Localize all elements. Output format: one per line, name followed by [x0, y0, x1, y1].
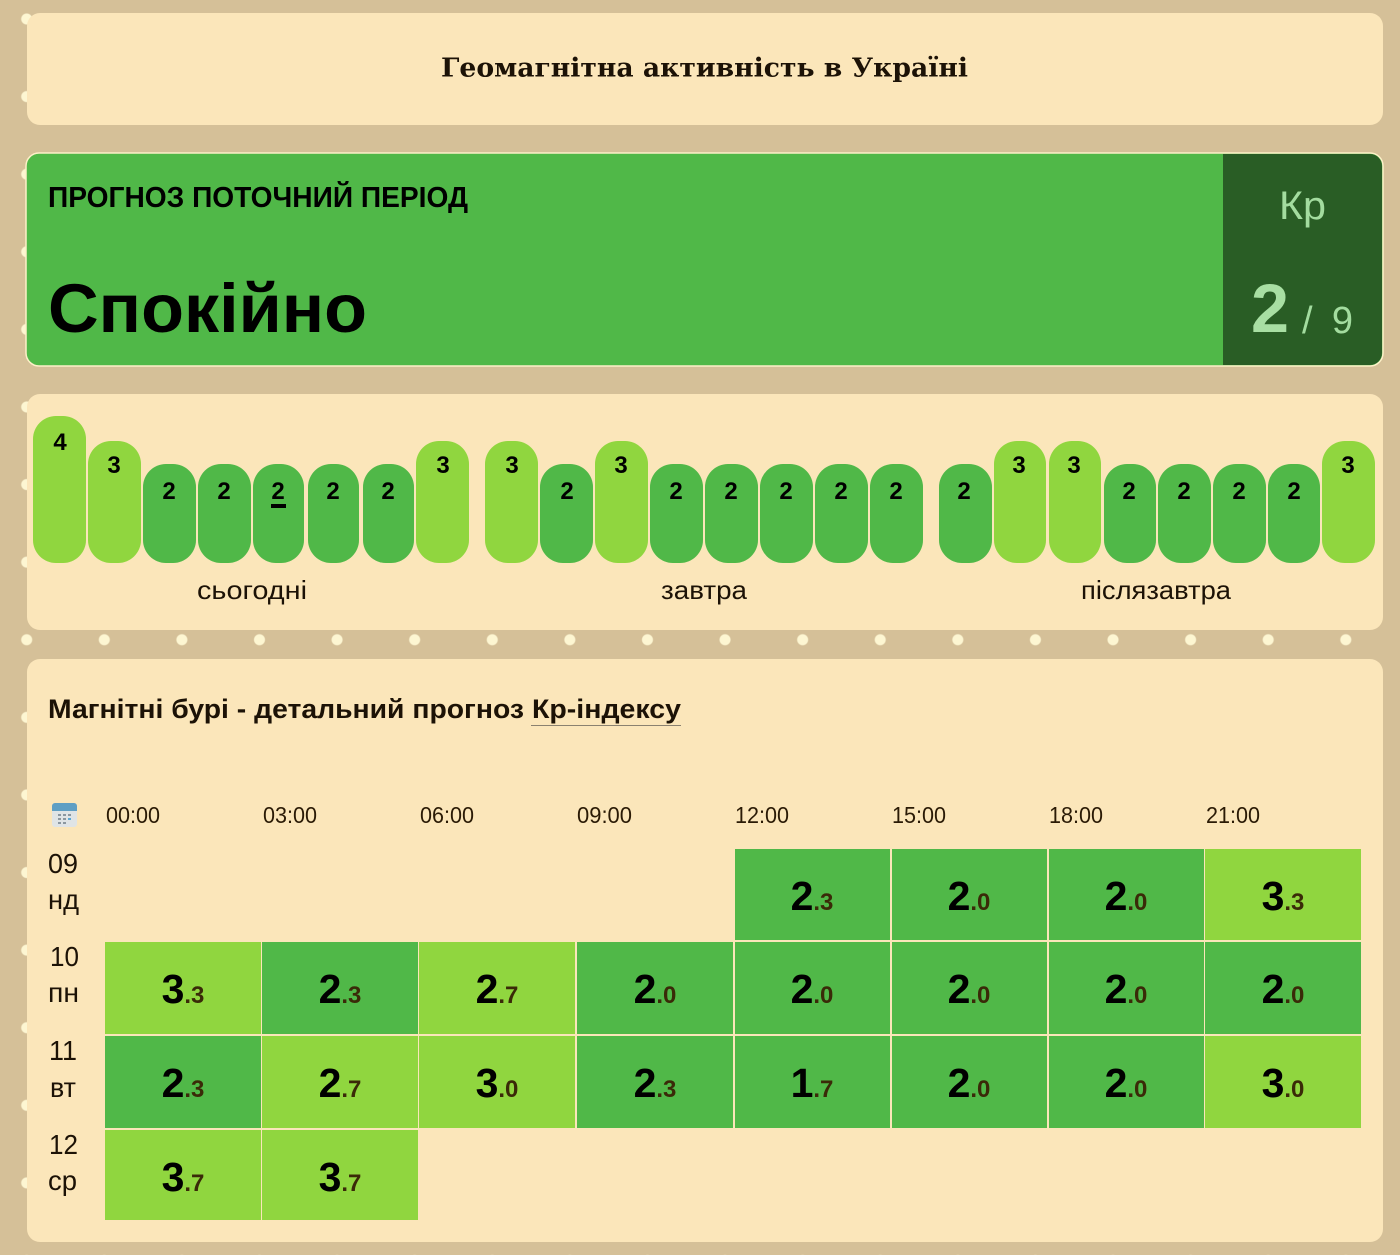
row: day 11: 3.0	[1262, 1060, 1304, 1106]
axis: days: 10	[50, 941, 79, 972]
axis: hours: 00:00	[106, 802, 160, 828]
chart: day after tomorrow: 2	[1287, 478, 1301, 505]
axis: hours: 12:00	[735, 802, 789, 828]
row: day 11: 1.7	[791, 1060, 833, 1106]
row: day 10: 2.0	[791, 966, 833, 1012]
row: day 11: 3.0	[476, 1060, 518, 1106]
axis: hours: 06:00	[420, 802, 474, 828]
chart: tomorrow: 2	[560, 478, 574, 505]
chart: today: 2	[162, 478, 176, 505]
row: day 11: 2.3	[634, 1060, 676, 1106]
chart: day after tomorrow: 2	[1122, 478, 1136, 505]
axis: days: 12	[49, 1129, 78, 1160]
axis: hours: 21:00	[1206, 802, 1260, 828]
row: day 12: 3.7	[319, 1154, 361, 1200]
row: day 11: 2.0	[948, 1060, 990, 1106]
panel: detailed forecast	[27, 659, 1383, 1242]
chart: today: 2	[326, 478, 340, 505]
row: day 10: 2.0	[634, 966, 676, 1012]
row: day 11: 2.0	[1105, 1060, 1147, 1106]
label: Kp: Кр	[1279, 184, 1326, 228]
chart: today: 3	[107, 452, 121, 479]
axis: hours: 03:00	[263, 802, 317, 828]
row: day 12: 3.7	[162, 1154, 204, 1200]
heading: detailed forecast: Магнітні бурі - детальний прогноз	[48, 694, 524, 724]
row: day 11: 2.7	[319, 1060, 361, 1106]
heading: detailed forecast: Кр-індексу	[532, 694, 681, 724]
axis: days: 09	[48, 848, 78, 879]
row: day 11: 2.3	[162, 1060, 204, 1106]
label: tomorrow: завтра	[661, 575, 748, 605]
chart: tomorrow: 2	[669, 478, 683, 505]
row: day 11	[105, 1036, 1361, 1128]
panel: title	[27, 13, 1383, 125]
table: Kp index forecast	[105, 849, 1361, 1220]
row: day 09: 2.3	[791, 873, 833, 919]
axis: days: ср	[48, 1165, 77, 1196]
chart: today: 4	[53, 429, 67, 456]
chart: tomorrow: 2	[834, 478, 848, 505]
chart: day after tomorrow: 3	[1341, 452, 1355, 479]
panel: current forecast	[26, 153, 1383, 366]
label: today: сьогодні	[197, 575, 307, 605]
axis: days: 11	[49, 1035, 77, 1066]
panel: three-day forecast	[27, 394, 1383, 630]
row: day 12	[105, 1130, 418, 1220]
chart: today: 2	[271, 478, 285, 505]
axis: days: нд	[48, 884, 79, 915]
row: day 09: 2.0	[948, 873, 990, 919]
label: day after tomorrow: післязавтра	[1081, 575, 1232, 605]
chart: today: 2	[381, 478, 395, 505]
row: day 09: 2.0	[1105, 873, 1147, 919]
row: day 10: 2.3	[319, 966, 361, 1012]
chart: tomorrow	[485, 441, 923, 563]
row: day 10	[105, 942, 1361, 1034]
chart: tomorrow: 2	[779, 478, 793, 505]
chart: tomorrow: 2	[724, 478, 738, 505]
axis: hours	[106, 802, 1260, 828]
row: day 09	[735, 849, 1361, 940]
panel: Kp value	[1223, 154, 1382, 365]
value: 2 of 9	[1251, 270, 1353, 347]
chart: today: 2	[217, 478, 231, 505]
chart: today	[33, 416, 469, 563]
axis: days: вт	[50, 1072, 76, 1103]
row: day 10: 2.0	[948, 966, 990, 1012]
row: day 10: 2.0	[1262, 966, 1304, 1012]
chart: tomorrow: 3	[614, 452, 628, 479]
status: calm: Спокійно	[48, 270, 367, 347]
chart: day after tomorrow: 2	[957, 478, 971, 505]
axis: hours: 18:00	[1049, 802, 1103, 828]
icon: calendar	[52, 803, 77, 827]
chart: day after tomorrow: 2	[1177, 478, 1191, 505]
value: 2 of 9: 2	[1251, 270, 1289, 347]
row: day 10: 2.7	[476, 966, 518, 1012]
axis: days	[48, 848, 79, 1196]
heading: detailed forecast	[48, 694, 681, 726]
chart: day after tomorrow: 2	[1232, 478, 1246, 505]
chart: tomorrow: 2	[889, 478, 903, 505]
label: forecast period: ПРОГНОЗ ПОТОЧНИЙ ПЕРІОД	[48, 180, 468, 214]
row: day 10: 3.3	[162, 966, 204, 1012]
axis: hours: 15:00	[892, 802, 946, 828]
row: day 10: 2.0	[1105, 966, 1147, 1012]
chart: tomorrow: 3	[505, 452, 519, 479]
heading: title: Геомагнітна активність в Україні	[441, 54, 968, 84]
axis: hours: 09:00	[577, 802, 632, 828]
value: 2 of 9: / 9	[1302, 300, 1353, 342]
chart: day after tomorrow	[939, 441, 1375, 563]
row: day 09: 3.3	[1262, 873, 1304, 919]
chart: day after tomorrow: 3	[1012, 452, 1026, 479]
axis: days: пн	[48, 977, 79, 1008]
chart: today: 3	[436, 452, 450, 479]
chart: day after tomorrow: 3	[1067, 452, 1081, 479]
